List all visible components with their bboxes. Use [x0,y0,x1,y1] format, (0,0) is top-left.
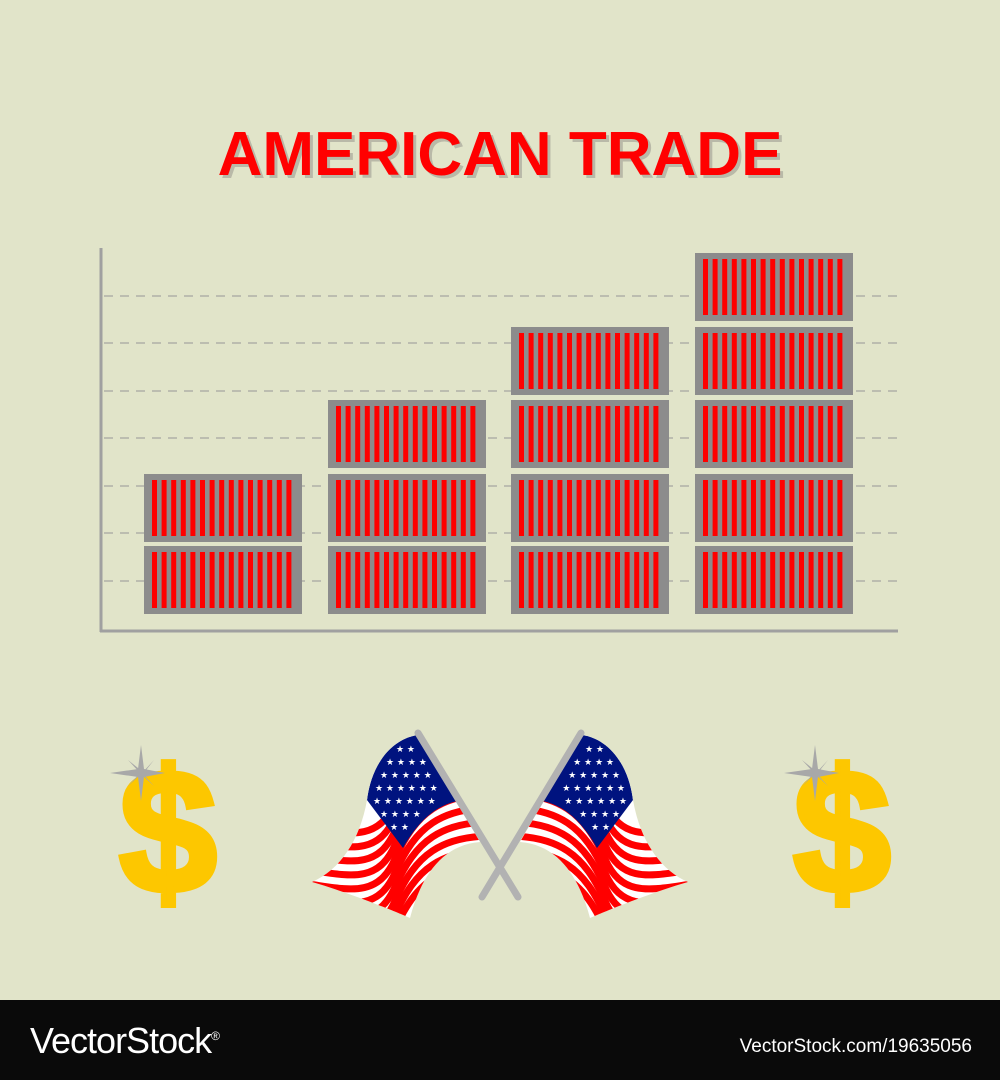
bar 2 [328,400,486,614]
left flag: ★ ★ ★ ★ ★ ★ [373,797,436,807]
left flag: ★ ★ ★ ★ [380,810,421,820]
bar 3 [511,327,669,614]
title: AMERICAN TRADE [218,120,782,189]
left flag: ★ ★ ★ ★ [386,758,427,768]
icon: dollar right: $ [793,735,891,930]
left flag: ★ ★ [396,745,415,755]
bar chart [100,248,898,632]
bar 4 [695,253,853,614]
main graphics [100,248,898,918]
poles [418,733,581,897]
left flag: ★ ★ ★ ★ ★ [380,771,432,781]
axes [100,248,898,632]
right flag [500,720,710,959]
footer logo: VectorStock® [30,1020,219,1061]
footer url: VectorStock.com/19635056 [740,1036,972,1057]
icon: dollar left: $ [119,735,217,930]
bar 1 [144,474,302,614]
left flag: ★ ★ ★ ★ ★ ★ [375,784,438,794]
icon: crossed flags [312,730,688,918]
grid lines [104,296,898,581]
footer bar [0,1000,1000,1080]
left flag [290,720,500,959]
left flag: ★ ★ [390,823,409,833]
